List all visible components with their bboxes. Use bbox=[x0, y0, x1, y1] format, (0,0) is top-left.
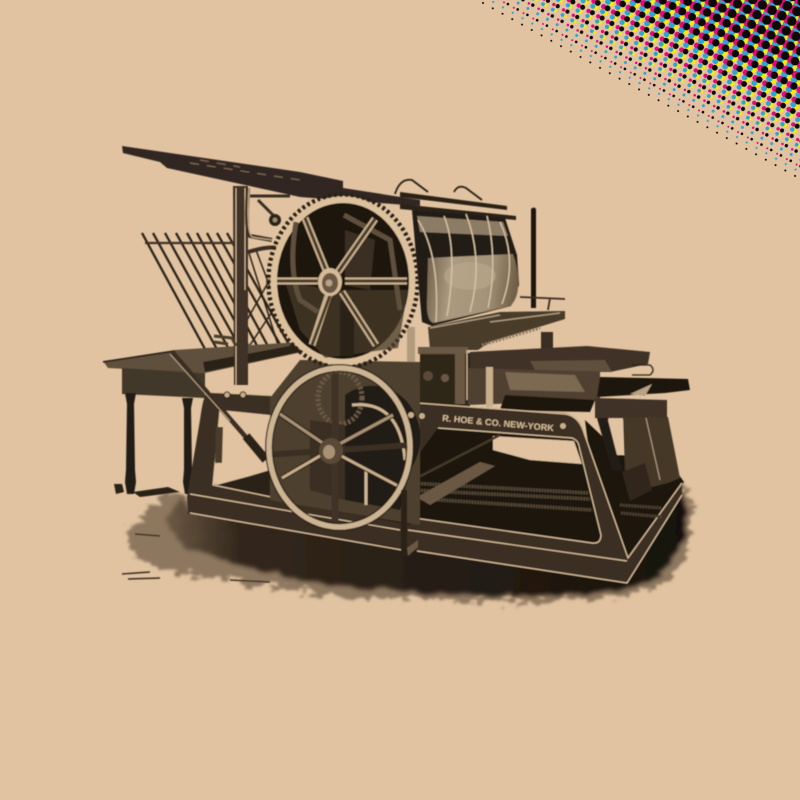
top delivery board bbox=[122, 146, 516, 220]
paper gap bbox=[493, 436, 582, 464]
side box bbox=[622, 463, 652, 501]
printing press engraving bbox=[103, 146, 694, 602]
fan fly delivery sticks bbox=[142, 233, 292, 362]
base frame bbox=[187, 392, 684, 584]
slanted ink blade bbox=[413, 435, 500, 480]
ink table bbox=[428, 311, 565, 350]
large cog wheel bbox=[268, 194, 418, 368]
floor shadow bbox=[114, 484, 694, 602]
press bed and rails bbox=[407, 327, 690, 420]
machine window bbox=[407, 428, 600, 543]
right feed rollers bbox=[620, 505, 662, 517]
window floor bbox=[213, 440, 410, 525]
foot pedal bbox=[401, 490, 418, 556]
rollers bbox=[410, 483, 592, 510]
impression cylinder bbox=[412, 210, 519, 326]
frame bolts bbox=[224, 392, 566, 430]
vertical lever bbox=[520, 208, 565, 310]
left window bbox=[213, 410, 300, 500]
rear frame upright bbox=[214, 186, 290, 385]
right interior floor bbox=[585, 420, 684, 560]
rail highlights bbox=[190, 392, 682, 583]
long connecting rod bbox=[170, 352, 266, 460]
maker's plate text: R. HOE & CO. NEW-YORK bbox=[442, 413, 555, 433]
central machinery behind flywheel bbox=[265, 360, 420, 525]
hand flywheel bbox=[269, 368, 410, 527]
cog spokes bbox=[277, 218, 407, 345]
flywheel spokes bbox=[277, 373, 400, 522]
side table bbox=[103, 342, 302, 494]
CMYK halftone corner bbox=[452, 0, 800, 193]
